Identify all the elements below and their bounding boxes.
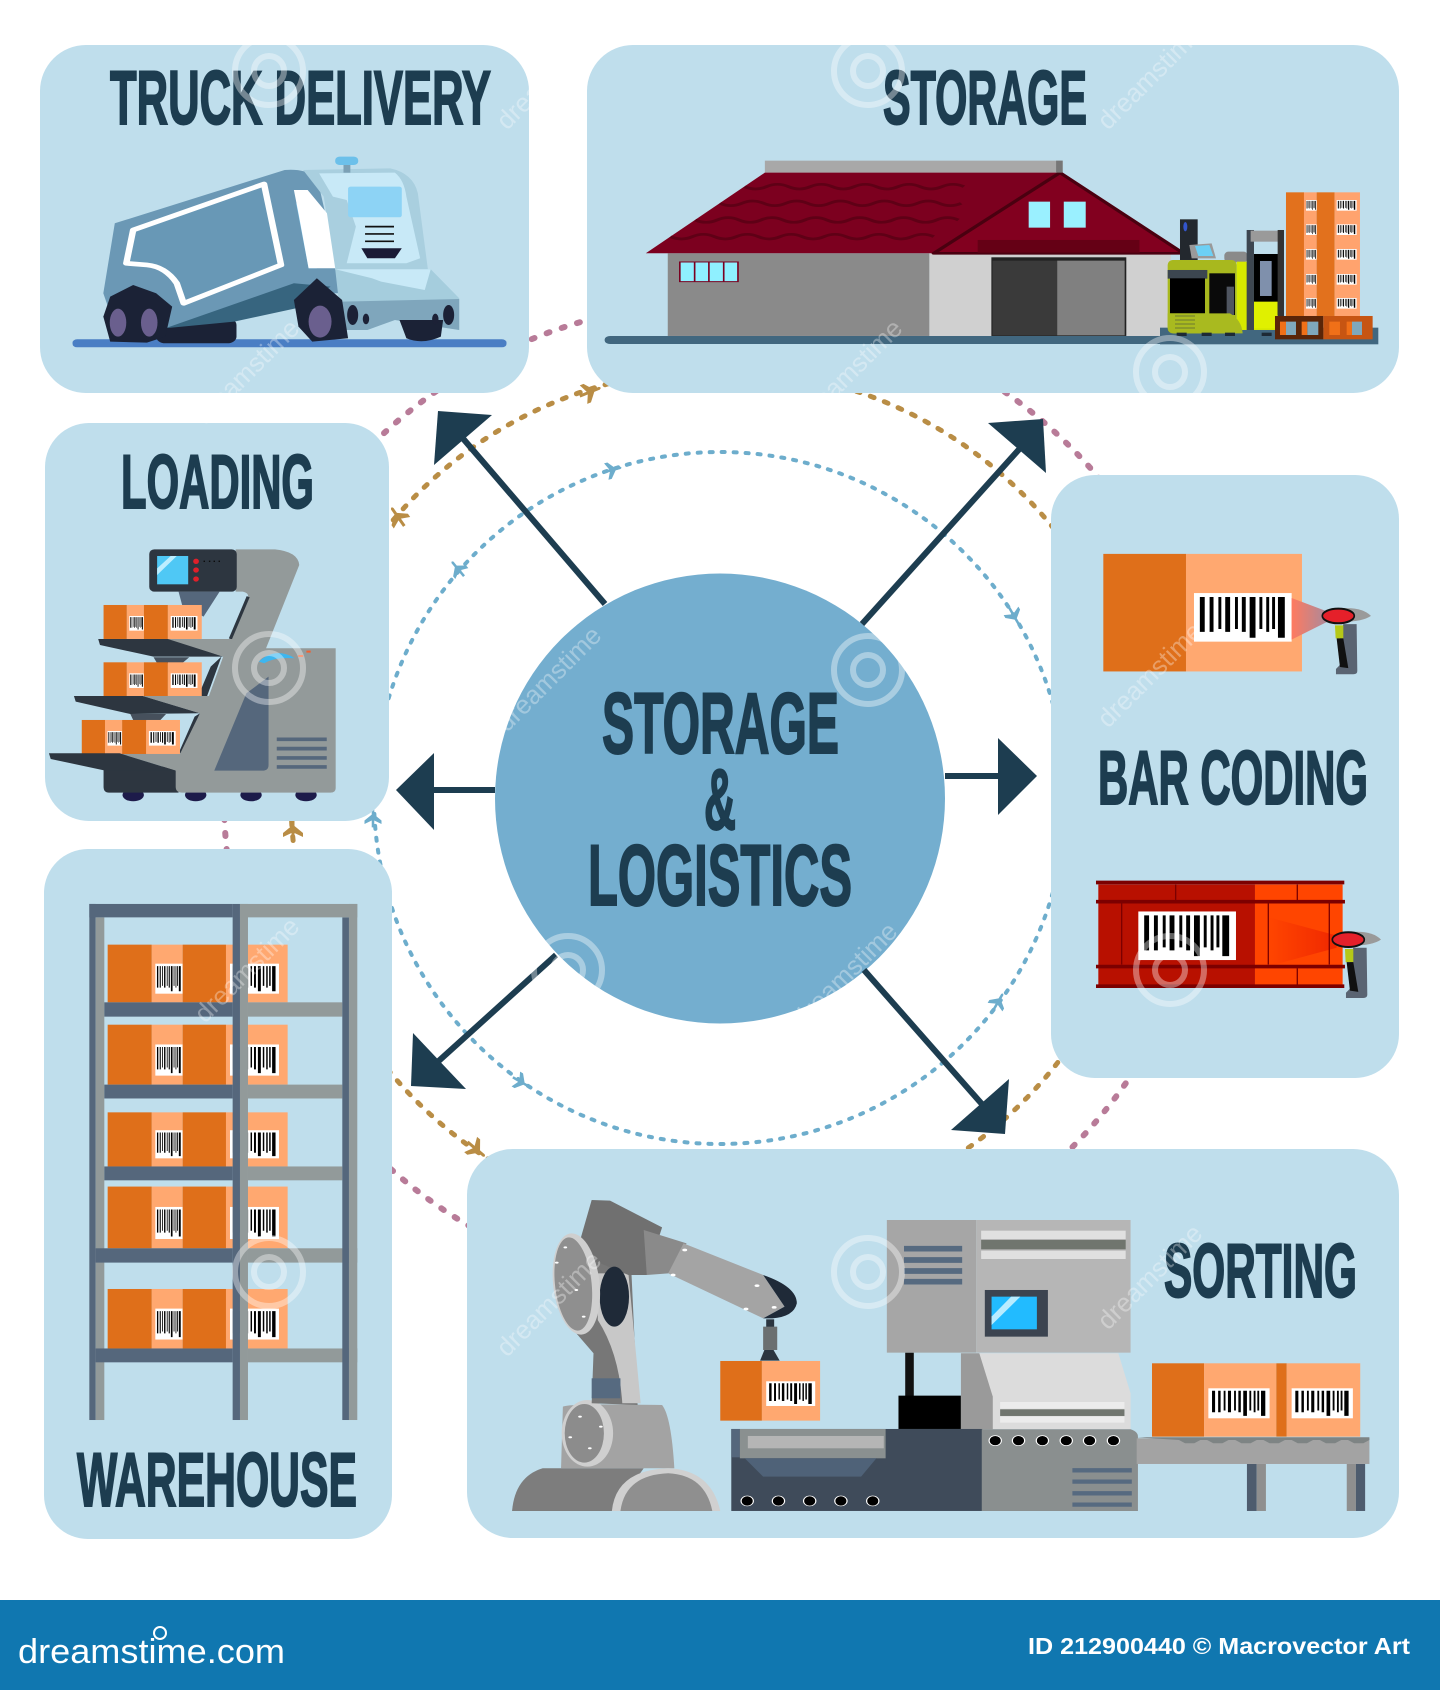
watermark text: dreamstime: [188, 313, 305, 430]
heading: loading: LOADING: [121, 440, 314, 525]
icon: loading robot with boxes: [49, 549, 336, 801]
arrow: to bar coding: [945, 738, 1037, 815]
watermark text: dreamstime: [490, 620, 607, 737]
icon: autonomous truck: [73, 157, 506, 347]
title: storage & logistics: LOGISTICS: [588, 828, 852, 924]
watermark text: dreamstime: [786, 916, 903, 1033]
heading: storage: STORAGE: [883, 56, 1087, 141]
watermark text: dreamstime: [490, 18, 607, 135]
footer logo: dreamstime.com: [18, 1633, 285, 1671]
watermark spirals: [235, 37, 1204, 1306]
arrow: to sorting: [864, 970, 1009, 1134]
title: storage & logistics: STORAGE: [602, 676, 839, 772]
watermark text: dreamstime: [791, 313, 908, 430]
panel: truck delivery: [40, 45, 529, 393]
icon: red container being scanned: [1096, 882, 1381, 998]
heading: truck delivery: TRUCK DELIVERY: [110, 56, 491, 141]
watermark text: dreamstime: [188, 911, 305, 1028]
footer bar: [0, 1600, 1440, 1690]
watermark text: [188, 18, 1208, 1362]
panel: loading: [45, 423, 389, 821]
panel: bar coding: [1051, 475, 1399, 1078]
title: storage & logistics: &: [704, 752, 736, 848]
icon: warehouse racking with boxes: [89, 904, 357, 1420]
arrow: to truck delivery: [434, 411, 605, 604]
panel: sorting: [467, 1149, 1399, 1538]
arrow: to loading: [396, 753, 495, 830]
arrow: to storage: [862, 419, 1046, 624]
watermark text: dreamstime: [1091, 18, 1208, 135]
panel: warehouse: [44, 849, 392, 1539]
heading: warehouse: WAREHOUSE: [77, 1438, 357, 1523]
watermark text: dreamstime: [490, 1245, 607, 1362]
icon: forklift with pallet of boxes: [1160, 192, 1378, 344]
watermark text: dreamstime: [1091, 616, 1208, 733]
dashed rings with planes: [224, 302, 1216, 1294]
icon: conveyor with boxes: [1137, 1363, 1369, 1511]
icon: warehouse building: [605, 161, 1208, 344]
watermark text: dreamstime: [1091, 1218, 1208, 1335]
central circle: [495, 574, 945, 1024]
icon: sorting machine: [731, 1220, 1138, 1511]
icon: box being scanned: [1103, 554, 1371, 674]
icon: robot arm holding box: [512, 1200, 820, 1511]
title: storage & logistics: [588, 676, 852, 924]
panel: storage: [587, 45, 1399, 393]
arrow: to warehouse: [411, 955, 556, 1089]
footer credit: ID 212900440 © Macrovector Art: [1028, 1633, 1410, 1659]
